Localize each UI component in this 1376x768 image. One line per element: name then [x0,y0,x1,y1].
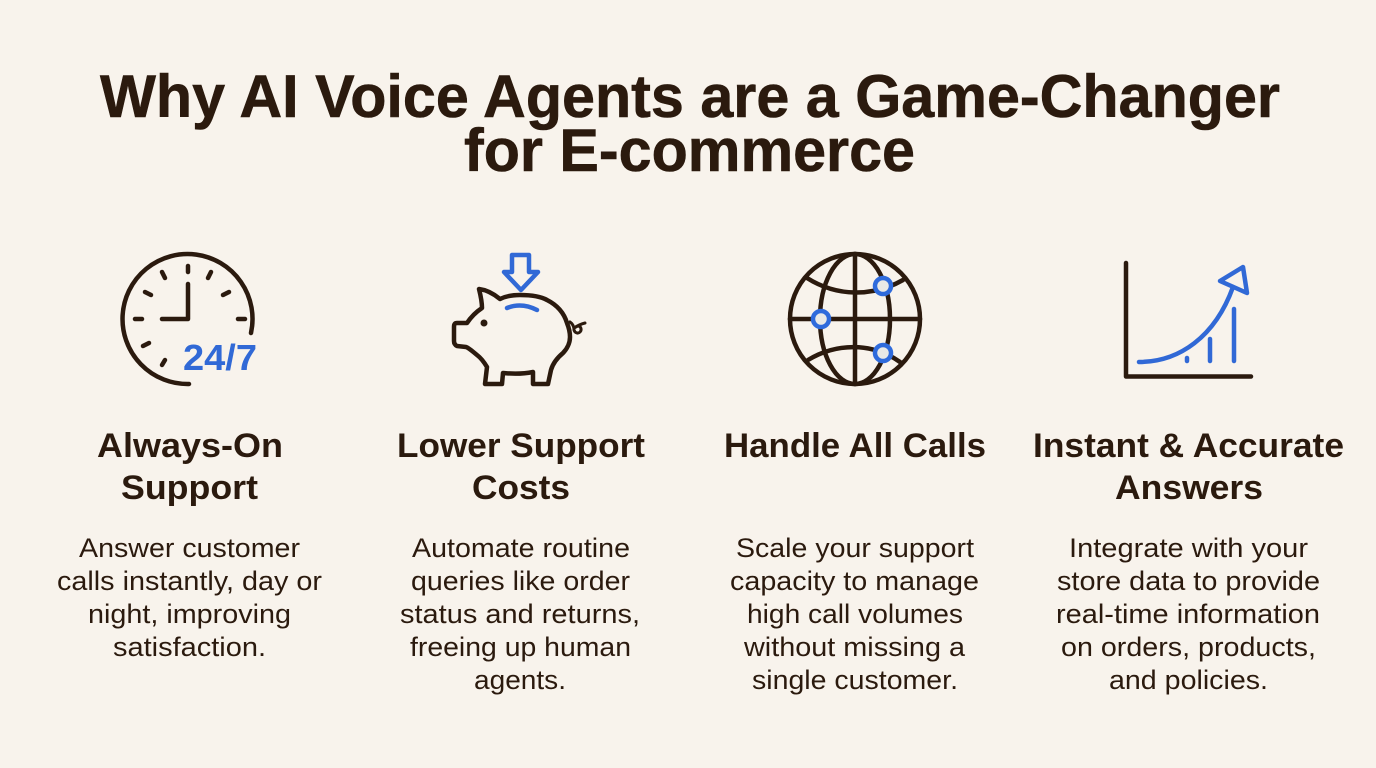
text: instant answers description: Integrate with your [1069,533,1308,563]
title: for E-commerce [464,117,915,184]
text: instant answers description: real-time information [1056,599,1320,629]
text: lower costs description: freeing up human [410,632,631,662]
text: instant answers description: on orders, products, [1061,632,1316,662]
text: always-on description: night, improving [88,599,291,629]
heading: instant and accurate: Answers [1115,469,1263,507]
heading: always-on support: Always-On [97,427,283,465]
heading: always-on support [97,427,283,507]
text: handle calls description: Scale your support [736,533,975,563]
heading: handle all calls: Handle All Calls [724,427,986,465]
text: handle calls description: without missing a [743,632,966,662]
text: always-on description: Answer customer [79,533,300,563]
panel: lower support costs [397,255,645,695]
text: handle calls description: capacity to manage [730,566,979,596]
text: lower costs description: agents. [474,665,566,695]
text: lower costs description: Automate routine [412,533,630,563]
panel: always-on support [57,254,322,662]
icon: piggy bank with arrow [454,255,585,384]
heading: always-on support: Support [121,469,258,507]
text: instant answers description [1056,533,1320,695]
text: always-on description: calls instantly, day or [57,566,322,596]
icon: clock 24/7 [123,254,257,384]
title [100,63,1280,184]
title: Why AI Voice Agents are a Game-Changer [100,63,1280,130]
heading: lower support costs: Costs [472,469,570,507]
heading: instant and accurate: Instant & Accurate [1033,427,1344,465]
icon: clock 24/7: 24/7 [183,337,257,378]
heading: lower support costs: Lower Support [397,427,645,465]
text: handle calls description [730,533,979,695]
text: instant answers description: store data to provide [1057,566,1320,596]
icon: globe with nodes [790,254,920,384]
text: lower costs description [400,533,640,695]
text: handle calls description: single customer. [752,665,958,695]
text: handle calls description: high call volumes [747,599,963,629]
text: instant answers description: and policies. [1109,665,1268,695]
text: always-on description: satisfaction. [113,632,266,662]
text: lower costs description: queries like order [411,566,630,596]
heading: lower support costs [397,427,645,507]
text: always-on description [57,533,322,662]
icon: growth chart [1126,263,1251,376]
panel: handle all calls [724,254,986,695]
panel: instant and accurate answers [1033,263,1344,695]
heading: instant and accurate [1033,427,1344,507]
text: lower costs description: status and returns, [400,599,640,629]
